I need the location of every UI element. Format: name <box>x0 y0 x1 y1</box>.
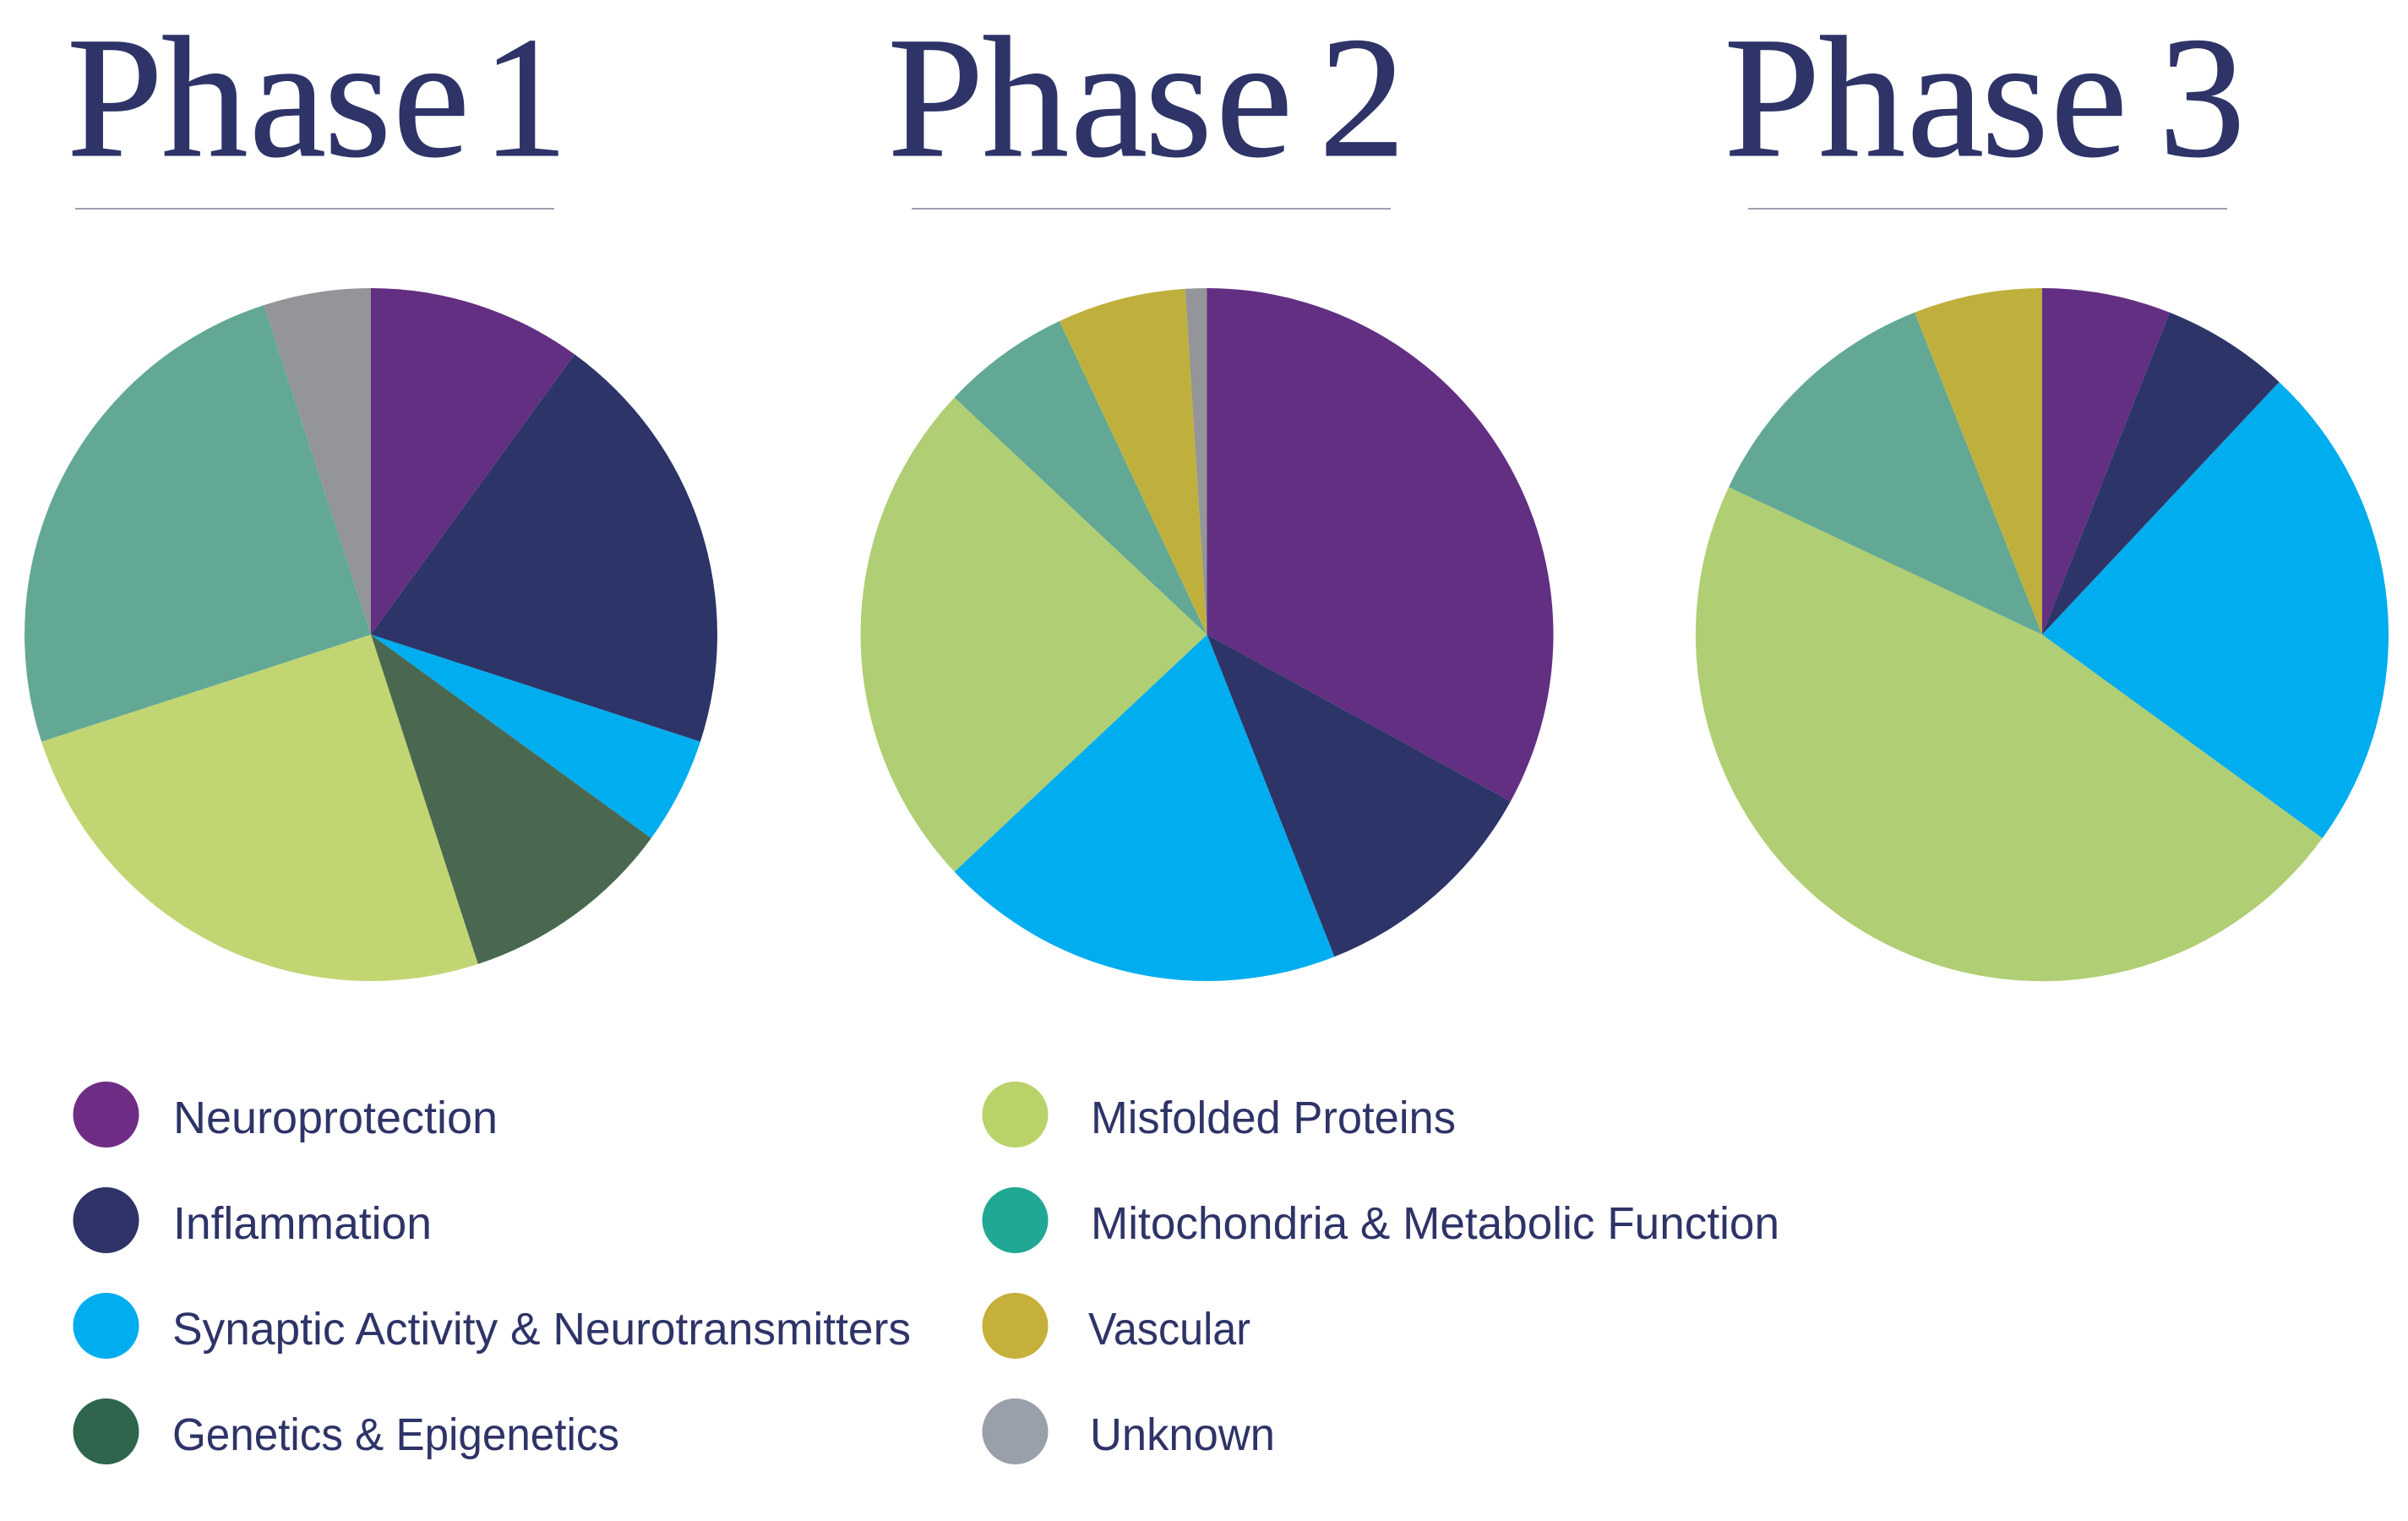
heading: Phase 1: Phase 1 <box>67 2 568 194</box>
legend item: Inflammation: Inflammation <box>173 1198 432 1249</box>
legend item: Misfolded Proteins: Misfolded Proteins <box>1091 1093 1456 1143</box>
legend item: Genetics & Epigenetics: Genetics & Epigenetics <box>172 1409 619 1460</box>
legend item: Mitochondria & Metabolic Function: Mitochondria & Metabolic Function <box>1091 1198 1779 1249</box>
legend item: Unknown: Unknown <box>1090 1409 1275 1460</box>
panel: phase 2 <box>861 2 1554 981</box>
legend item: Misfolded Proteins <box>982 1082 1456 1148</box>
legend item: Genetics & Epigenetics <box>73 1398 619 1464</box>
legend item: Vascular <box>982 1293 1250 1359</box>
pie chart: phase 1 <box>25 288 717 981</box>
legend item: Synaptic Activity & Neurotransmitters: Synaptic Activity & Neurotransmitters <box>172 1304 911 1355</box>
panel: phase 3 <box>1696 2 2389 981</box>
legend item: Neuroprotection <box>73 1082 498 1148</box>
legend item: Neuroprotection: Neuroprotection <box>173 1093 498 1143</box>
legend item: Mitochondria & Metabolic Function <box>982 1187 1779 1253</box>
pie chart: phase 2 <box>861 288 1554 981</box>
heading: Phase 3: Phase 3 <box>1724 2 2246 194</box>
panel: phase 1 <box>25 2 717 981</box>
legend item: Inflammation <box>73 1187 432 1253</box>
legend item: Synaptic Activity & Neurotransmitters <box>73 1293 911 1359</box>
legend item: Unknown <box>982 1398 1275 1464</box>
legend item: Vascular: Vascular <box>1088 1304 1250 1355</box>
pie chart: phase 3 <box>1696 288 2389 981</box>
legend <box>73 1082 1779 1464</box>
heading: Phase 2: Phase 2 <box>887 2 1406 194</box>
